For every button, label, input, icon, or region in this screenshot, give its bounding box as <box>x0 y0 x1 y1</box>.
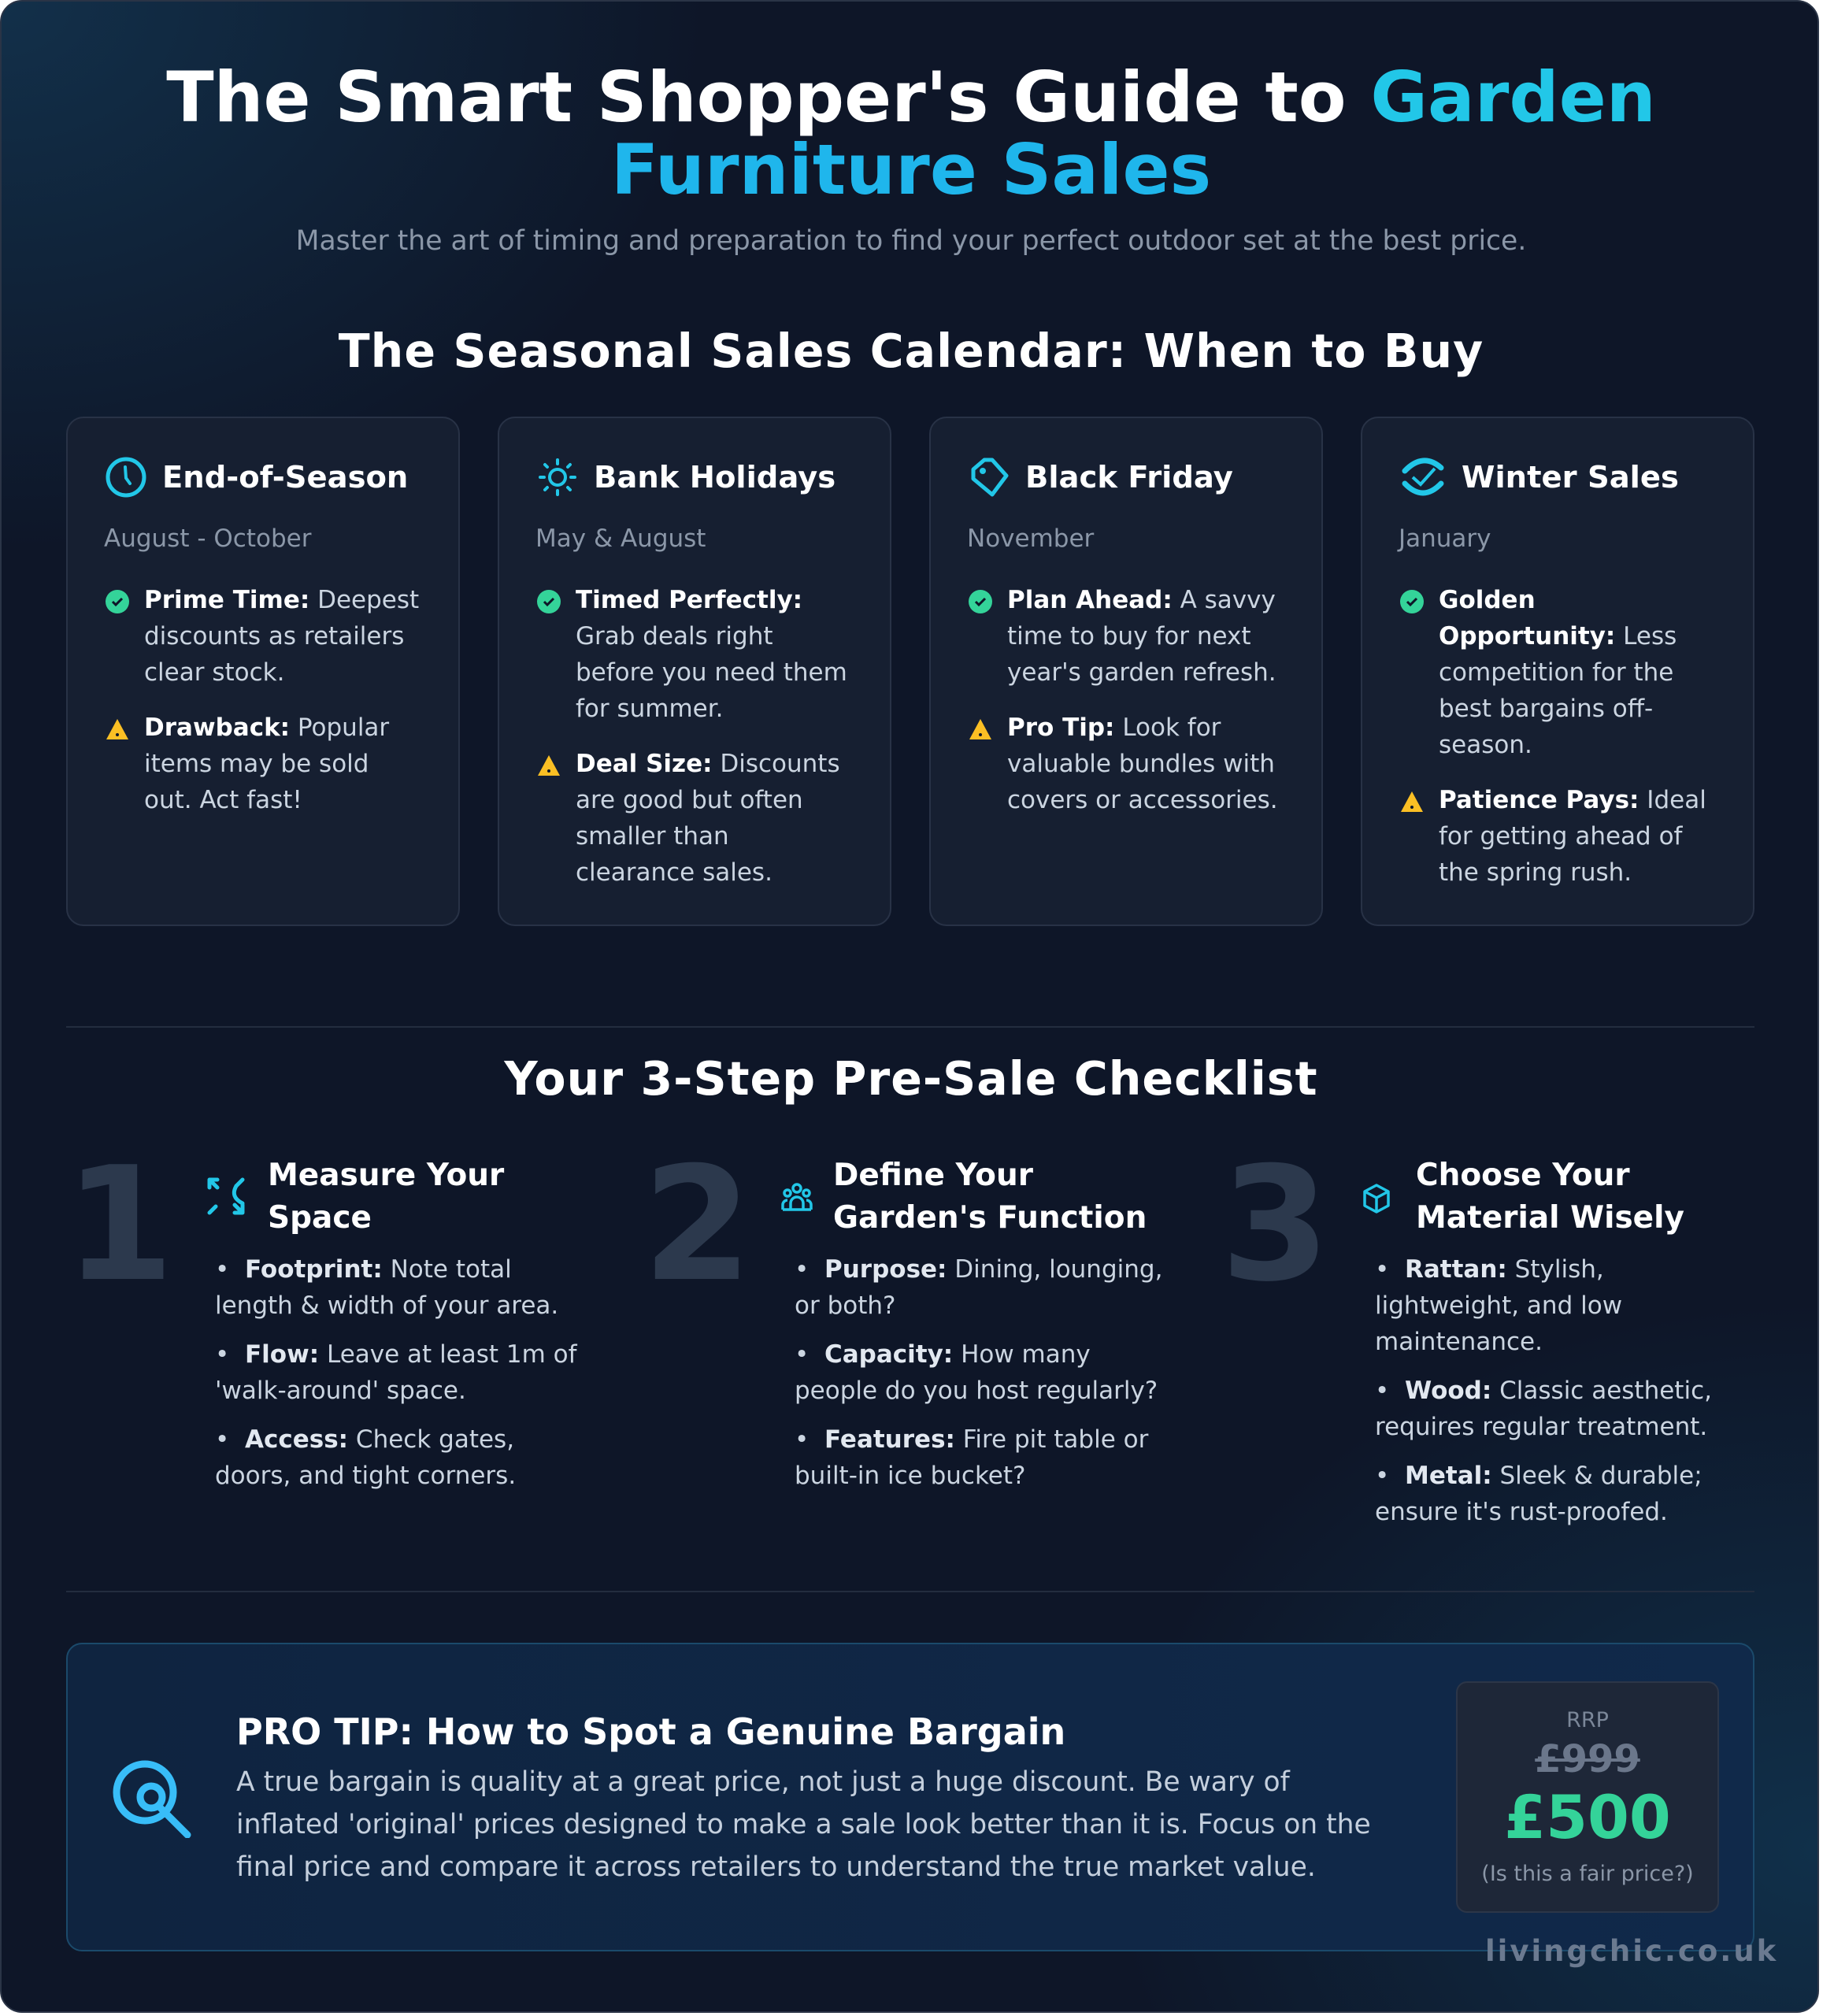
subtitle: Master the art of timing and preparation to find your perfect outdoor set at the best price. <box>296 225 1526 257</box>
date: November <box>967 524 1094 553</box>
step title <box>1416 1158 1684 1236</box>
price box: £999 <box>1535 1737 1640 1781</box>
item: patience pays: Patience Pays: Ideal for getting ahead of the spring rush. <box>1439 786 1706 887</box>
price box <box>1456 1681 1719 1913</box>
date: May & August <box>535 524 706 553</box>
step title: Measure Your <box>268 1158 504 1193</box>
card heading: End-of-Season <box>162 460 408 495</box>
card heading: Winter Sales <box>1462 460 1679 495</box>
bullets <box>215 1255 578 1490</box>
item: deal size: Deal Size: Discounts are good but often smaller than clearance sales. <box>576 750 840 887</box>
pro tip text: A true bargain is quality at a great price, not just a huge discount. Be wary of inflated 'original' prices designed to make a sale look better than it is. Focus on the final price and compare it across retailers to understand the true market value. <box>236 1766 1371 1883</box>
pro tip heading: PRO TIP: How to Spot a Genuine Bargain <box>236 1710 1065 1753</box>
card heading: Black Friday <box>1025 460 1233 495</box>
number 3: 3 <box>1221 1133 1330 1317</box>
step title: Define Your <box>833 1158 1033 1193</box>
price box: (Is this a fair price?) <box>1481 1862 1694 1886</box>
card heading: Bank Holidays <box>594 460 835 495</box>
title <box>166 57 1656 210</box>
heading: checklist: Your 3-Step Pre-Sale Checklist <box>504 1052 1318 1106</box>
step 3 <box>1221 1133 1712 1526</box>
bullets: • Rattan: Stylish, lightweight, and low maintenance. <box>1375 1255 1622 1356</box>
bullets: • Flow: Leave at least 1m of 'walk-around' space. <box>215 1340 577 1405</box>
icon: people <box>781 1183 813 1211</box>
number 1: 1 <box>65 1133 174 1317</box>
title: The Smart Shopper's Guide to Garden <box>166 57 1656 138</box>
bullets: • Wood: Classic aesthetic, requires regular treatment. <box>1375 1377 1712 1441</box>
heading: seasonal calendar: The Seasonal Sales Calendar: When to Buy <box>339 324 1484 378</box>
bullets: • Access: Check gates, doors, and tight corners. <box>215 1425 516 1490</box>
bullets: • Purpose: Dining, lounging, or both? <box>795 1255 1162 1320</box>
panel: bank holidays <box>498 417 891 926</box>
step 2 <box>643 1133 1162 1490</box>
step title: Material Wisely <box>1416 1200 1684 1236</box>
bullets: • Features: Fire pit table or built-in ice bucket? <box>795 1425 1148 1490</box>
price box: £500 <box>1504 1782 1671 1852</box>
step 1 <box>65 1133 578 1490</box>
bullets <box>1375 1255 1712 1526</box>
step title <box>268 1158 504 1236</box>
icon: cube <box>1363 1184 1390 1214</box>
watermark: livingchic.co.uk <box>1485 1934 1778 1968</box>
item: drawback: Drawback: Popular items may be sold out. Act fast! <box>144 713 389 814</box>
item: timed perfectly: Timed Perfectly: Grab deals right before you need them for summer. <box>576 586 847 723</box>
panel: winter sales <box>1361 417 1754 926</box>
bullets: • Footprint: Note total length & width of your area. <box>215 1255 558 1320</box>
step title: Space <box>268 1200 372 1236</box>
bullets: • Capacity: How many people do you host regularly? <box>795 1340 1158 1405</box>
date: January <box>1399 524 1491 553</box>
step title: Choose Your <box>1416 1158 1630 1193</box>
icon: measure <box>208 1178 244 1214</box>
price box: RRP <box>1566 1708 1609 1732</box>
item: pro tip: Pro Tip: Look for valuable bundles with covers or accessories. <box>1007 713 1278 814</box>
icon: magnifier <box>113 1761 191 1838</box>
panel: end-of-season <box>66 417 460 926</box>
item: prime time: Prime Time: Deepest discounts as retailers clear stock. <box>144 586 419 687</box>
title: Furniture Sales <box>611 129 1211 210</box>
step title <box>833 1158 1147 1236</box>
bullets: • Metal: Sleek & durable; ensure it's rust-proofed. <box>1375 1462 1702 1526</box>
item: plan ahead: Plan Ahead: A savvy time to buy for next year's garden refresh. <box>1007 586 1276 687</box>
step title: Garden's Function <box>833 1200 1147 1236</box>
panel: pro tip <box>66 1643 1754 1951</box>
number 2: 2 <box>643 1133 752 1317</box>
date: August - October <box>104 524 311 553</box>
panel: black friday <box>929 417 1323 926</box>
bullets <box>795 1255 1162 1490</box>
item: golden opportunity: Golden Opportunity: Less competition for the best bargains off-season. <box>1439 586 1677 759</box>
